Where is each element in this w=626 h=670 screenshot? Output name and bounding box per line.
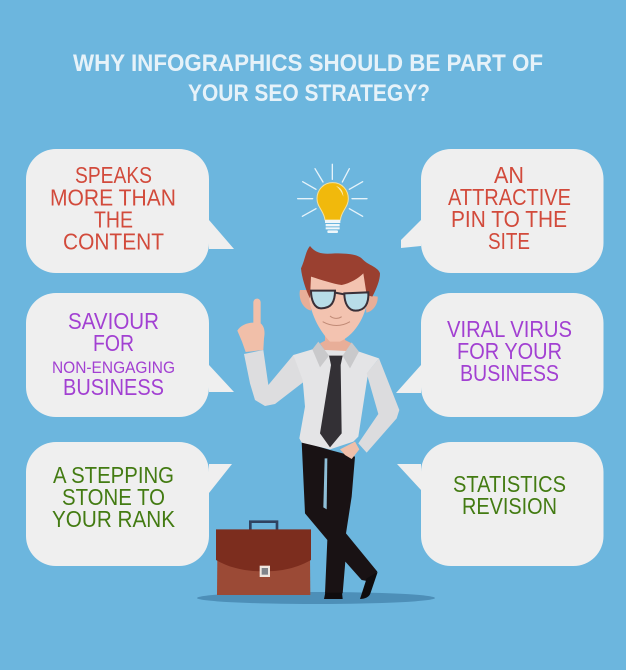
panel: a stepping stone to your rank: STONE TO bbox=[62, 484, 165, 510]
face bbox=[309, 272, 368, 342]
panel: an attractive pin to the site: ATTRACTIVE bbox=[448, 184, 571, 210]
title bbox=[73, 50, 543, 107]
collar bbox=[312, 342, 359, 368]
panel: speaks more than the content bbox=[26, 149, 234, 273]
panel: an attractive pin to the site: SITE bbox=[488, 228, 530, 254]
panel: a stepping stone to your rank: A STEPPING bbox=[53, 462, 174, 488]
nose and smile bbox=[323, 316, 350, 325]
panel: speaks more than the content: SPEAKS bbox=[75, 162, 152, 188]
icon: light bulb bbox=[298, 164, 367, 233]
panel: an attractive pin to the site bbox=[401, 149, 604, 273]
hair bbox=[301, 246, 380, 298]
panel: viral virus for your business: BUSINESS bbox=[460, 360, 559, 386]
title: YOUR SEO STRATEGY? bbox=[188, 80, 430, 107]
panel: saviour for non-engaging business: NON-ENGAGING bbox=[52, 358, 175, 377]
panel: viral virus for your business: VIRAL VIRUS bbox=[447, 316, 572, 342]
trousers and shoes bbox=[302, 442, 378, 599]
panel: statistics revision: REVISION bbox=[462, 493, 557, 519]
panel: an attractive pin to the site: AN bbox=[494, 162, 524, 188]
panel: speaks more than the content: THE bbox=[94, 206, 133, 232]
ears bbox=[300, 290, 378, 313]
title: WHY INFOGRAPHICS SHOULD BE PART OF bbox=[73, 50, 543, 77]
panel: saviour for non-engaging business: SAVIOUR bbox=[68, 308, 159, 334]
glasses bbox=[311, 291, 368, 311]
head bbox=[300, 246, 380, 342]
left hand pointing finger bbox=[237, 299, 265, 352]
shirt body bbox=[293, 349, 379, 449]
right hand bbox=[340, 442, 359, 459]
panel: statistics revision bbox=[397, 442, 604, 566]
tie bbox=[320, 356, 343, 447]
shadow under figure bbox=[197, 592, 435, 604]
right arm bbox=[358, 358, 399, 453]
panel: a stepping stone to your rank bbox=[26, 442, 232, 566]
torso and arms bbox=[237, 299, 399, 459]
panel: saviour for non-engaging business bbox=[26, 293, 234, 417]
panel: speaks more than the content: MORE THAN bbox=[50, 184, 176, 210]
panel: saviour for non-engaging business: FOR bbox=[93, 330, 134, 356]
character: man with glasses bbox=[237, 246, 399, 599]
icon: briefcase bbox=[216, 522, 311, 595]
panel: statistics revision: STATISTICS bbox=[453, 471, 566, 497]
panel: a stepping stone to your rank: YOUR RANK bbox=[52, 506, 176, 532]
panel: speaks more than the content: CONTENT bbox=[63, 228, 164, 254]
panel: an attractive pin to the site: PIN TO THE bbox=[451, 206, 567, 232]
panel: viral virus for your business: FOR YOUR bbox=[457, 338, 562, 364]
panel: saviour for non-engaging business: BUSINESS bbox=[63, 374, 164, 400]
panel: viral virus for your business bbox=[396, 293, 604, 417]
left arm bbox=[244, 350, 306, 406]
neck bbox=[320, 330, 352, 356]
